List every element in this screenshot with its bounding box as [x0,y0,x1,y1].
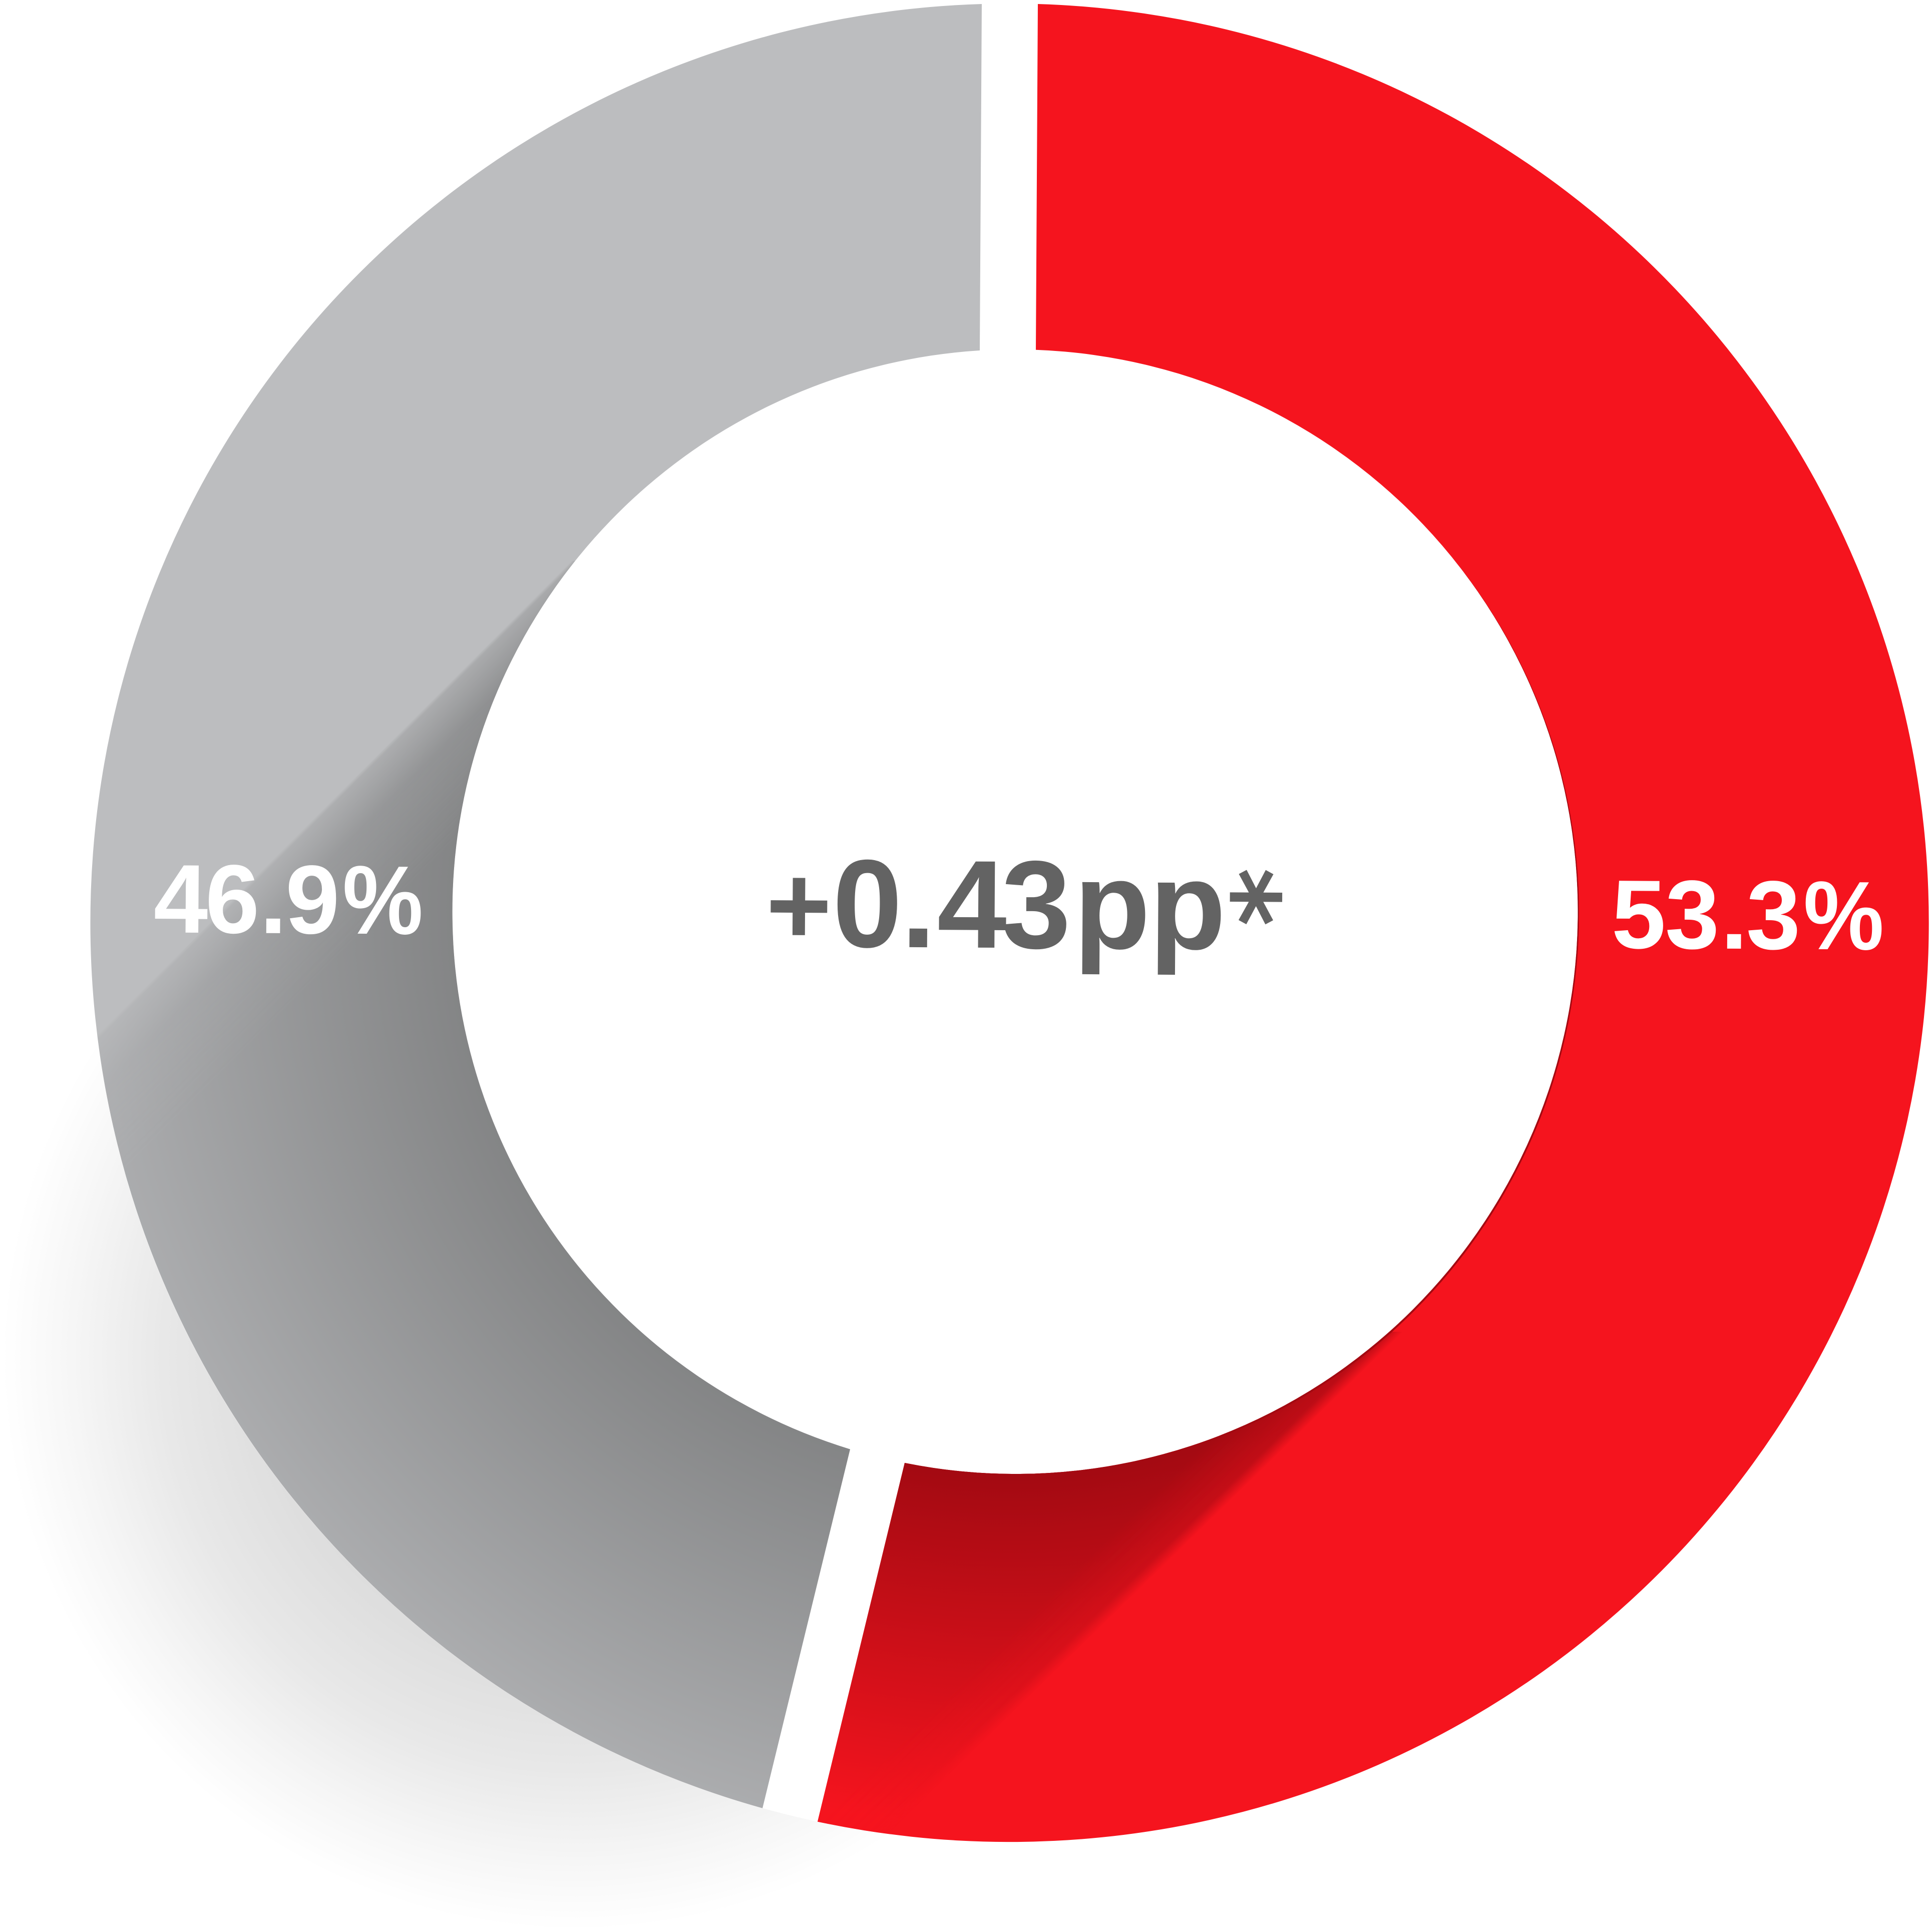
center value: +0.43pp*: 0.43pp [832,834,1227,976]
segment: grey 46.9% [90,4,982,1808]
drop shadow under the ring [3,784,1149,1930]
label: 46.9%: 46.9 [153,844,340,955]
center value: +0.43pp*: * [1172,867,1303,927]
label: 46.9%: % [342,846,424,955]
label: 53.3%: % [1803,861,1884,970]
label: 46.9% [153,844,424,955]
center value: +0.43pp*: + [765,842,832,968]
segment: red 53.3% [770,4,1929,1842]
label: 53.3%: 53.3 [1611,860,1801,970]
label: 53.3% [1611,860,1884,971]
